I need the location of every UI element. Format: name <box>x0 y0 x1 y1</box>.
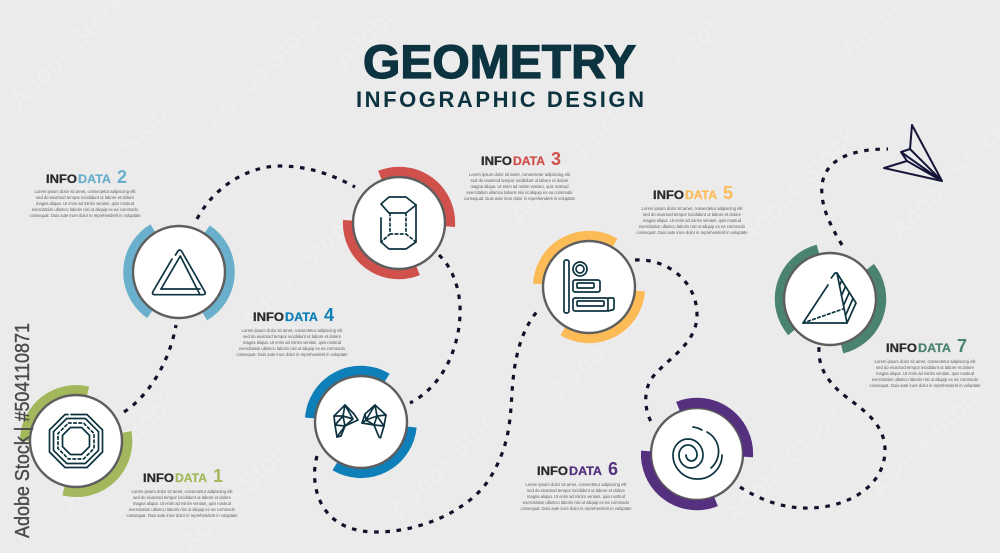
text: Adobe Stock <box>199 6 327 134</box>
text block 3: magna aliqua. Ut enim ad minim veniam, quis nostrud <box>470 184 569 189</box>
text block 1: consequat. Duis aute irure dolor in reprehenderit in voluptate <box>126 513 238 518</box>
ring: green arcs <box>25 390 127 492</box>
text block 1: exercitation ullamco laboris nisi ut aliquip ex ea commodo <box>129 507 236 512</box>
text: Adobe Stock <box>54 386 182 514</box>
text block 7: sed do eiusmod tempor incididunt ut labore et dolore <box>876 365 975 370</box>
text: Adobe Stock <box>234 206 362 334</box>
text block 4 <box>236 328 348 357</box>
panel: step 5 <box>538 183 748 338</box>
heading: infodata 3: DATA <box>513 154 545 168</box>
panel: step 1 <box>25 390 238 518</box>
text block 5: exercitation ullamco laboris nisi ut aliquip ex ea commodo <box>639 224 746 229</box>
text block 5: sed do eiusmod tempor incididunt ut labore et dolore <box>643 212 742 217</box>
text block 4: consequat. Duis aute irure dolor in reprehenderit in voluptate <box>236 352 348 357</box>
text block 6: Lorem ipsum dolor sit amet, consectetur adipiscing elit <box>526 482 627 487</box>
text block 4: magna aliqua. Ut enim ad minim veniam, quis nostrud <box>243 340 342 345</box>
text block 5 <box>636 206 748 235</box>
icon: polygonal mesh shapes <box>315 376 407 468</box>
text block 2 <box>30 189 141 218</box>
text block 3: exercitation ullamco laboris nisi ut aliquip ex ea commodo <box>466 190 573 195</box>
ring: light blue arcs <box>128 228 230 316</box>
icon: align-left shapes <box>543 241 635 333</box>
heading: infodata 2: INFO <box>46 172 77 186</box>
heading: infodata 1: INFO <box>143 471 174 485</box>
heading: infodata 6 <box>537 459 618 479</box>
text block 1: sed do eiusmod tempor incididunt ut labore et dolore <box>133 495 232 500</box>
text block 3: sed do eiusmod tempor incididunt ut labore et dolore <box>470 178 569 183</box>
text block 5: consequat. Duis aute irure dolor in reprehenderit in voluptate <box>636 230 748 235</box>
heading: infodata 2 <box>46 167 127 187</box>
text block 5: magna aliqua. Ut enim ad minim veniam, quis nostrud <box>643 218 742 223</box>
text block 3: Lorem ipsum dolor sit amet, consectetur adipiscing elit <box>469 172 571 177</box>
dashed path: step 7 to paper plane <box>822 149 888 245</box>
heading: infodata 7 <box>886 336 967 356</box>
text: Adobe Stock <box>719 401 847 529</box>
heading: infodata 4: INFO <box>253 310 284 324</box>
text block 6: consequat. Duis aute irure dolor in reprehenderit in voluptate <box>520 506 632 511</box>
heading: infodata 7: INFO <box>886 341 917 355</box>
text block 1: magna aliqua. Ut enim ad minim veniam, quis nostrud <box>133 501 232 506</box>
text: Adobe Stock <box>864 376 992 504</box>
stock id side label: Adobe Stock | #504110871 <box>12 323 34 538</box>
icon: octagon <box>30 395 122 487</box>
text block 4: exercitation ullamco laboris nisi ut aliquip ex ea commodo <box>239 346 346 351</box>
dashed path: step 6 to 7 <box>740 347 885 508</box>
text block 6 <box>520 482 632 511</box>
heading: infodata 3: INFO <box>481 154 512 168</box>
ring: purple arcs <box>646 403 748 505</box>
heading: infodata 6: DATA <box>569 464 602 478</box>
heading: infodata 5: INFO <box>653 188 684 202</box>
text block 1: Lorem ipsum dolor sit amet, consectetur adipiscing elit <box>132 489 233 494</box>
heading: infodata 4: DATA <box>285 310 318 324</box>
heading: infodata 7: DATA <box>918 341 951 355</box>
text block 5: Lorem ipsum dolor sit amet, consectetur adipiscing elit <box>642 206 743 211</box>
dashed path: step 2 to 3 <box>197 166 355 219</box>
heading: infodata 3: 3 <box>551 149 561 169</box>
heading: infodata 5: 5 <box>723 183 733 203</box>
icon: pyramid <box>784 253 876 345</box>
dashed path: step 5 to 6 <box>635 260 697 426</box>
icon: triangle <box>133 226 225 318</box>
text block 7: Lorem ipsum dolor sit amet, consectetur adipiscing elit <box>874 359 976 364</box>
ring: yellow arcs <box>538 236 640 338</box>
heading: infodata 1: DATA <box>175 471 207 485</box>
panel: step 6 <box>520 403 748 511</box>
panel: step 7 <box>780 250 981 388</box>
text: Adobe Stock <box>504 101 632 229</box>
text: Adobe Stock <box>54 91 182 219</box>
text block 4: Lorem ipsum dolor sit amet, consectetur adipiscing elit <box>242 328 343 333</box>
subtitle: INFOGRAPHIC DESIGN: INFOGRAPHIC DESIGN <box>356 87 644 112</box>
heading: infodata 1 <box>143 466 223 486</box>
text block 7: exercitation ullamco laboris nisi ut aliquip ex ea commodo <box>872 377 979 382</box>
text: Adobe Stock <box>544 276 672 404</box>
text block 7 <box>870 359 981 388</box>
panel: step 2 <box>30 167 230 318</box>
text block 6: exercitation ullamco laboris nisi ut aliquip ex ea commodo <box>523 500 630 505</box>
heading: infodata 5: DATA <box>685 188 717 202</box>
heading: infodata 4 <box>253 305 334 325</box>
dashed path: step 3 to 4 <box>410 255 460 403</box>
text block 2: magna aliqua. Ut enim ad minim veniam, quis nostrud <box>36 201 135 206</box>
text block 2: exercitation ullamco laboris nisi ut aliquip ex ea commodo <box>32 207 139 212</box>
text block 2: Lorem ipsum dolor sit amet, consectetur adipiscing elit <box>34 189 136 194</box>
dashed path: step 1 to 2 <box>124 325 176 412</box>
text block 7: magna aliqua. Ut enim ad minim veniam, quis nostrud <box>876 371 975 376</box>
heading: infodata 2: 2 <box>117 167 127 187</box>
panel: step 4 <box>236 305 412 473</box>
heading: infodata 5 <box>653 183 733 203</box>
heading: infodata 7: 7 <box>957 336 967 356</box>
text block 6: magna aliqua. Ut enim ad minim veniam, quis nostrud <box>527 494 626 499</box>
text: Adobe Stock <box>384 396 512 524</box>
heading: infodata 3 <box>481 149 561 169</box>
heading: infodata 4: 4 <box>324 305 334 325</box>
dashed path: step 4 to 5 <box>315 308 540 532</box>
text: Adobe Stock <box>734 121 862 249</box>
heading: infodata 6: INFO <box>537 464 568 478</box>
ring: deep blue arcs <box>310 371 412 473</box>
text block 3: consequat. Duis aute irure dolor in reprehenderit in voluptate <box>464 196 576 201</box>
text block 4: sed do eiusmod tempor incididunt ut labore et dolore <box>243 334 342 339</box>
heading: infodata 6: 6 <box>608 459 618 479</box>
heading: infodata 1: 1 <box>213 466 223 486</box>
heading: infodata 2: DATA <box>78 172 111 186</box>
text block 2: consequat. Duis aute irure dolor in reprehenderit in voluptate <box>30 213 141 218</box>
ring: teal arcs <box>780 250 881 348</box>
icon: spiral <box>651 408 743 500</box>
title: GEOMETRY: GEOMETRY <box>363 35 636 88</box>
text block 3 <box>464 172 576 201</box>
panel: step 3 <box>348 149 576 274</box>
text block 1 <box>126 489 238 518</box>
ring: red arcs <box>348 172 450 274</box>
text block 2: sed do eiusmod tempor incididunt ut labore et dolore <box>36 195 135 200</box>
text block 6: sed do eiusmod tempor incididunt ut labore et dolore <box>527 488 626 493</box>
icon: hexagonal prism <box>353 177 445 269</box>
icon: paper plane <box>884 125 942 181</box>
text block 7: consequat. Duis aute irure dolor in reprehenderit in voluptate <box>870 383 981 388</box>
